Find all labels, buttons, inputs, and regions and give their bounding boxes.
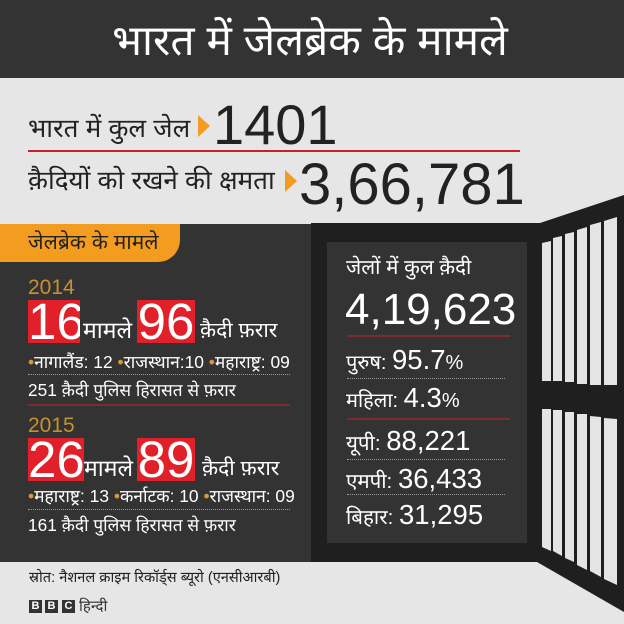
stat: men: पुरुष: 95.7% (346, 344, 463, 375)
label: capacity: क़ैदियों को रखने की क्षमता (28, 165, 275, 195)
logo letter B (29, 600, 42, 613)
title: भारत में जेलब्रेक के मामले (112, 18, 508, 65)
year: 2015: 2015 (28, 414, 75, 437)
logo letter C (62, 600, 75, 613)
police custody 2015: 161 क़ैदी पुलिस हिरासत से फ़रार (28, 515, 236, 535)
stat: UP: यूपी: 88,221 (346, 425, 470, 456)
number: total inmates: 4,19,623 (345, 285, 516, 334)
logo text Hindi: हिन्दी (79, 598, 107, 615)
panel: jailbreak cases (0, 224, 311, 562)
stat: total prisons (28, 93, 338, 156)
source: स्रोत: नैशनल क्राइम रिकॉर्ड्स ब्यूरो (एनसीआरबी) (29, 570, 280, 586)
stat: women: महिला: 4.3% (346, 382, 460, 413)
states 2015: •महाराष्ट्र: 13 •कर्नाटक: 10 •राजस्थान: 09 (28, 486, 295, 506)
label: cases 2015: मामले (84, 455, 133, 481)
number: capacity: 3,66,781 (299, 152, 525, 217)
states 2014: •नागालैंड: 12 •राजस्थान:10 •महाराष्ट्र: 09 (28, 352, 290, 372)
logo: BBC Hindi (29, 598, 108, 615)
label: escaped 2014: क़ैदी फ़रार (200, 319, 277, 342)
label: total prisons: भारत में कुल जेल (28, 113, 190, 143)
panel: total inmates (327, 242, 527, 543)
heading tab: jailbreak cases (0, 224, 180, 262)
divider: red (28, 150, 520, 152)
stat: Bihar: बिहार: 31,295 (346, 499, 483, 530)
stat: MP: एमपी: 36,433 (346, 463, 482, 494)
label: total inmates: जेलों में कुल क़ैदी (346, 256, 471, 279)
year: 2014: 2014 (28, 276, 75, 299)
label: cases 2014: मामले (83, 317, 132, 343)
logo letter B: B (32, 600, 39, 612)
logo letter B (45, 600, 58, 613)
label: escaped 2015: क़ैदी फ़रार (202, 457, 279, 480)
logo letter B: B (48, 600, 55, 612)
title (0, 0, 624, 78)
arrow: prisons (198, 115, 210, 137)
police custody 2014: 251 क़ैदी पुलिस हिरासत से फ़रार (28, 380, 236, 400)
stat: capacity (28, 152, 525, 217)
number: total prisons: 1401 (213, 93, 338, 156)
heading tab: jailbreak cases: जेलब्रेक के मामले (28, 231, 159, 254)
logo letter C: C (65, 600, 72, 612)
arrow: capacity (285, 170, 297, 192)
